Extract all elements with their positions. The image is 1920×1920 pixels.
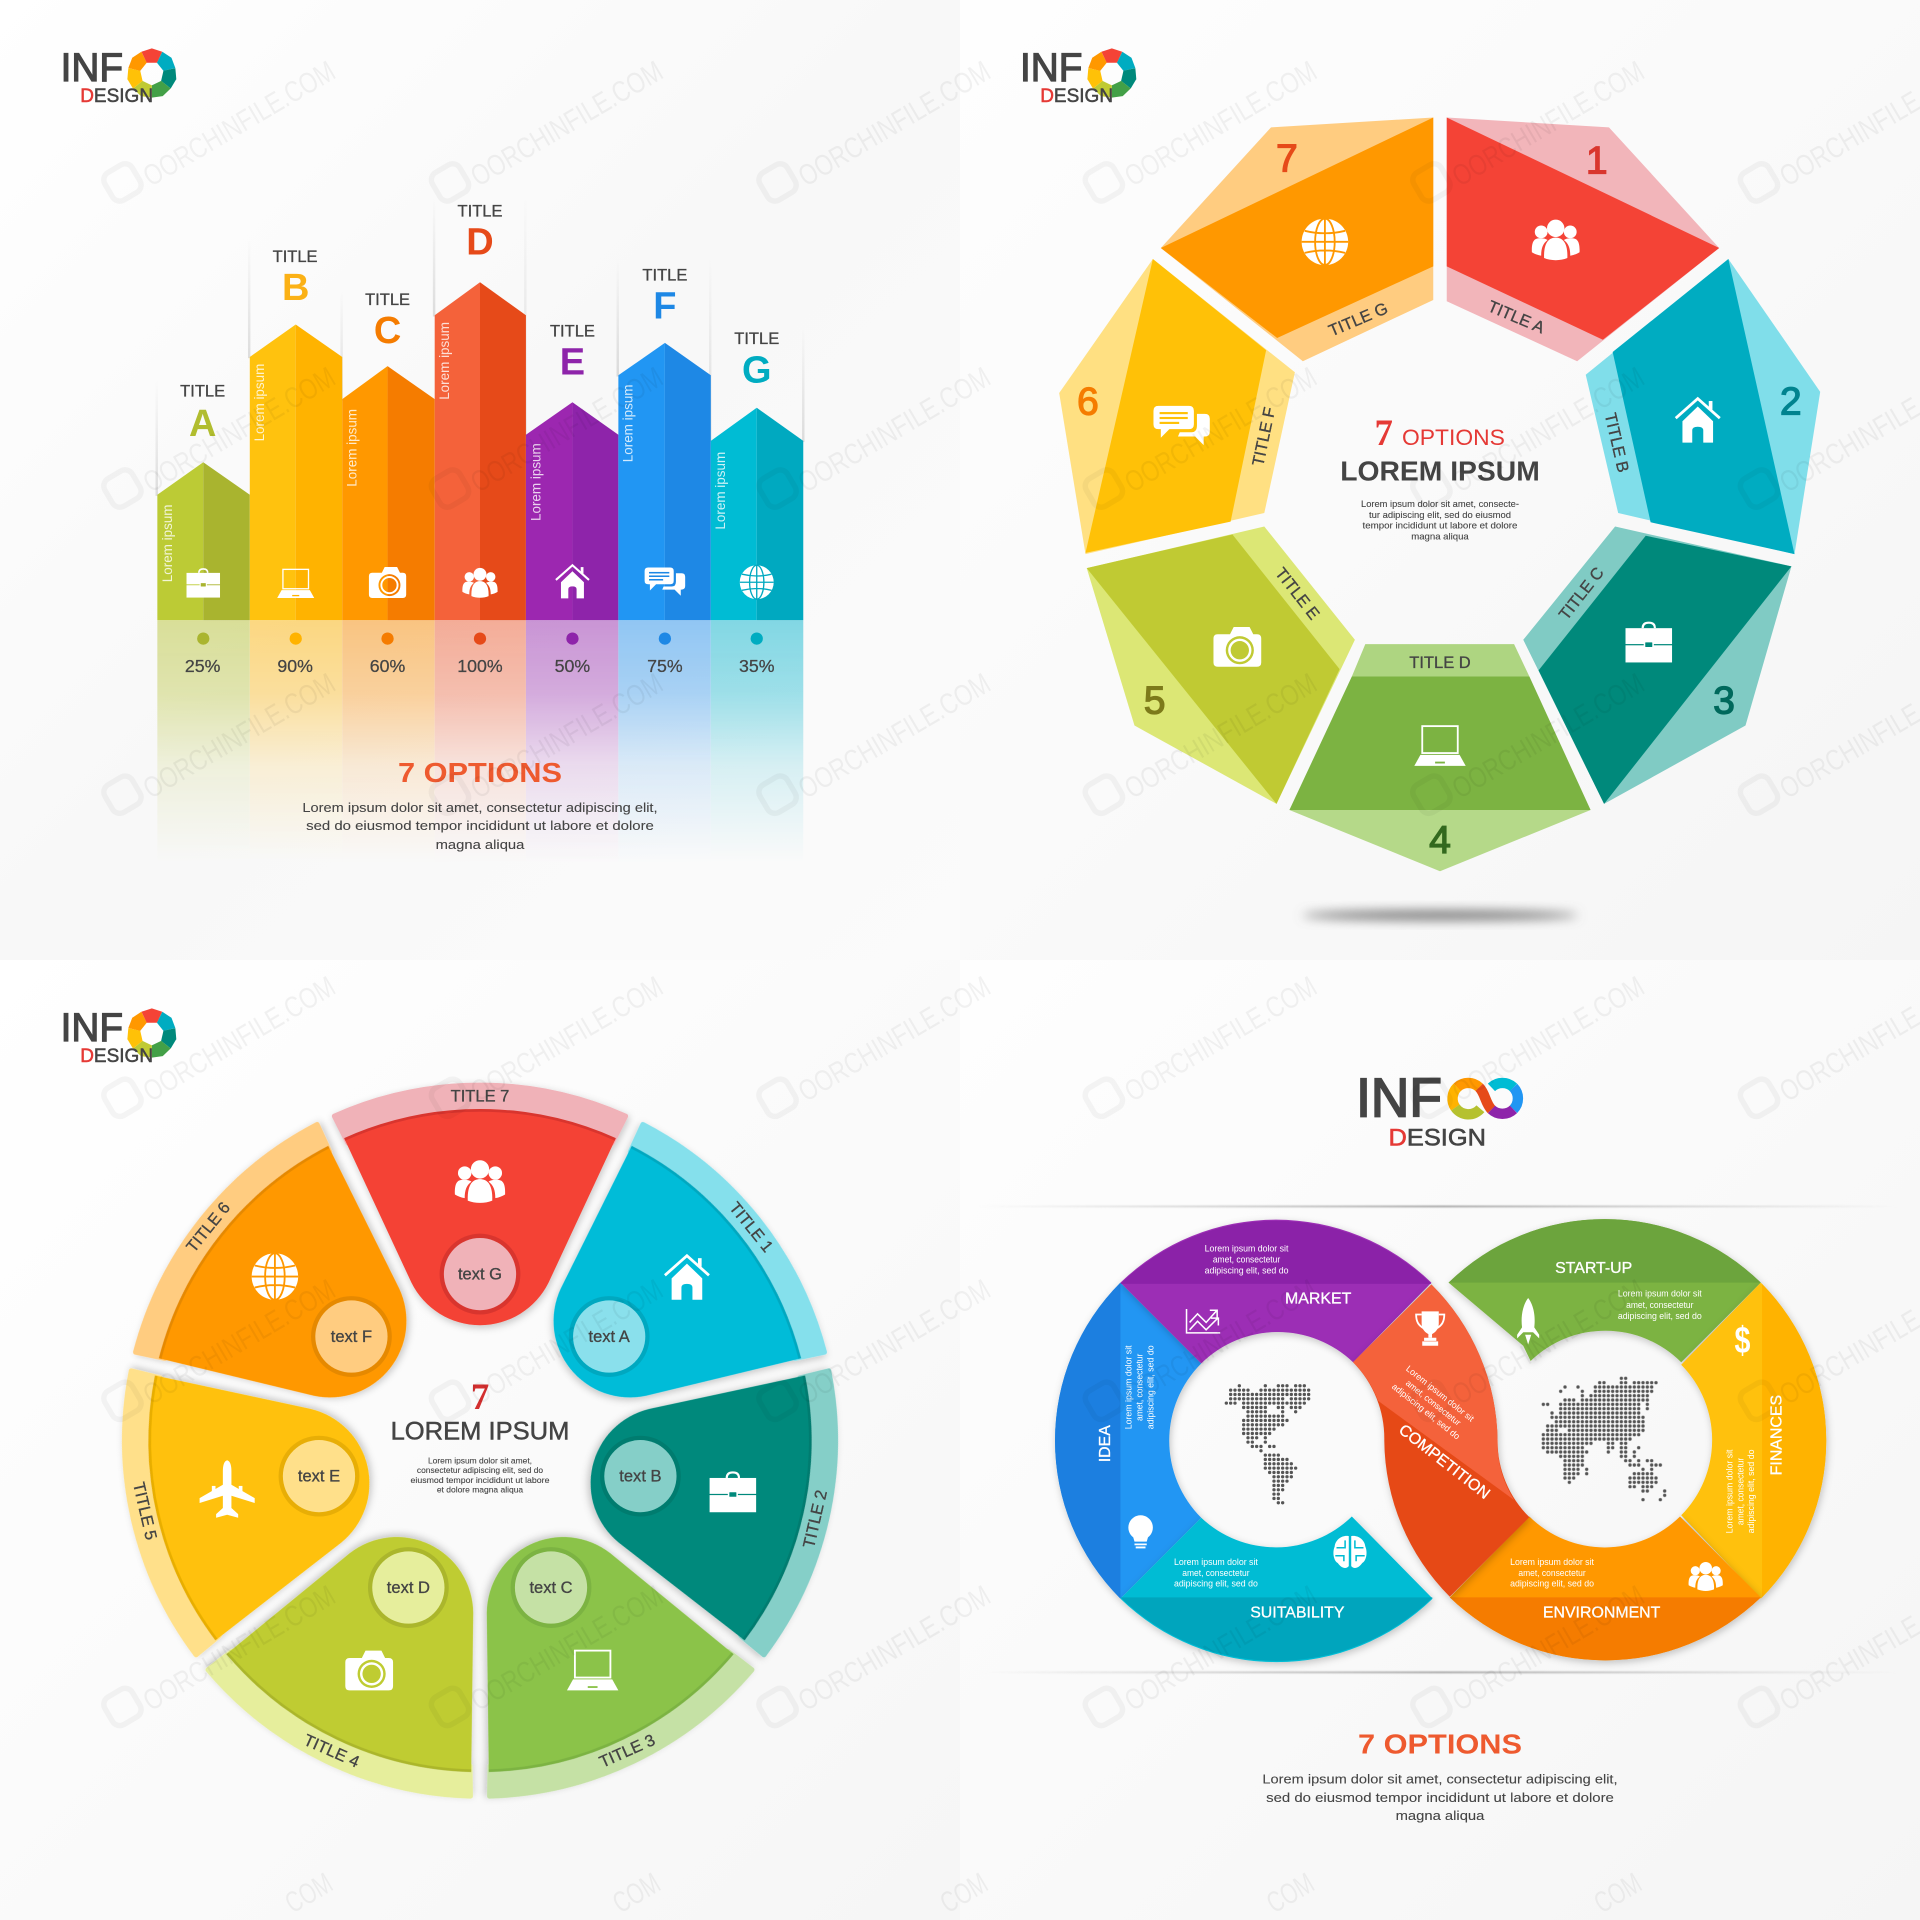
segment 2: 2 [1780,380,1802,423]
segment: environment: adipiscing elit, sed do [1510,1578,1594,1588]
description text [302,800,658,852]
center text: tempor incididunt ut labore et dolore [1363,520,1518,530]
segment: suitability: SUITABILITY [1250,1605,1345,1622]
bar F: 75% [647,656,683,676]
bar F [618,265,711,676]
segment: title 2: text B [619,1467,662,1486]
segment: idea: amet, consectetur [1134,1354,1144,1421]
segment: title 1: text A [589,1327,630,1346]
description text: sed do eiusmod tempor incididunt ut labore et dolore [306,818,654,833]
segment 3: TITLE C [1555,563,1608,624]
segment: competition: Lorem ipsum dolor sit [1404,1364,1476,1424]
segment: title 1: TITLE 1 [725,1198,777,1256]
segment 5: TITLE E [1271,564,1324,623]
center heading: OPTIONS [1402,425,1505,450]
segment: finances: adipiscing elit, sed do [1746,1449,1756,1533]
segment: title 3: text C [529,1578,573,1597]
segment: finances: $ [1734,1320,1750,1362]
description text [1262,1771,1618,1823]
watermarks: COM [1588,1867,1647,1920]
segment 2 [1586,259,1820,554]
segment: idea: adipiscing elit, sed do [1145,1345,1155,1429]
segment 1: 1 [1586,139,1608,182]
segment 6: TITLE F [1248,405,1279,468]
segment 6: 6 [1077,380,1099,423]
heading: 7 options: 7 OPTIONS [398,757,562,788]
segment: suitability: adipiscing elit, sed do [1174,1578,1258,1588]
watermarks: COM [279,1867,338,1920]
center text: et dolore magna aliqua [437,1486,524,1495]
bar B: B [282,267,309,309]
segment: market: amet, consectetur [1213,1254,1280,1264]
segment 1 [1447,118,1719,361]
segment 5 [1087,527,1355,804]
segment: title 6: TITLE 6 [182,1198,234,1256]
segment: title 1 [479,1105,849,1483]
bar F: TITLE [642,265,687,284]
logo [1020,46,1139,107]
bar D: 100% [457,656,503,676]
segment: suitability [1120,1517,1433,1662]
bar E: E [560,342,585,384]
logo [61,1006,179,1067]
description text: Lorem ipsum dolor sit amet, consectetur adipiscing elit, [1262,1771,1618,1786]
logo: infinity: DESIGN [1389,1125,1486,1152]
description text: magna aliqua [436,837,525,852]
logo: INF [1020,46,1082,90]
segment: market [1120,1220,1431,1363]
segment: title 6: text F [331,1327,372,1346]
segment: market: adipiscing elit, sed do [1205,1265,1289,1275]
segment: title 4: TITLE 4 [301,1730,362,1772]
divider bottom [978,1671,1903,1673]
bar E: TITLE [550,322,595,341]
center text: consectetur adipiscing elit, sed do [417,1466,543,1475]
center text [1361,499,1519,541]
segment 7: 7 [1276,137,1298,180]
heading: 7 options: 7 OPTIONS [1358,1728,1522,1759]
description text: sed do eiusmod tempor incididunt ut labore et dolore [1266,1790,1614,1805]
panel: infinity chart [978,1067,1903,1823]
segment: suitability: amet, consectetur [1182,1568,1250,1578]
bar F: F [653,285,676,327]
segment: suitability: Lorem ipsum dolor sit [1174,1557,1258,1567]
segment: title 2 [560,1324,859,1662]
logo: DESIGN [80,86,153,107]
segment: finances: FINANCES [1769,1395,1786,1475]
bar C [342,290,435,676]
logo: DESIGN [1040,86,1113,107]
bar G: G [742,350,771,392]
segment 4 [1289,644,1591,871]
divider top [978,1206,1903,1207]
center text: tur adipiscing elit, sed do eiusmod [1369,510,1511,520]
segment: finances [1681,1283,1826,1599]
bar F: Lorem ipsum [619,384,635,462]
segment: start-up [1449,1219,1761,1362]
segment 4: 4 [1429,819,1451,862]
logo: INF [61,1006,123,1050]
bar B: 90% [277,656,313,676]
panel: polygon ring chart [1020,46,1820,920]
bar D: Lorem ipsum [436,322,452,400]
segment: start-up: Lorem ipsum dolor sit [1618,1289,1702,1299]
segment: start-up: START-UP [1555,1260,1632,1277]
segment: environment: Lorem ipsum dolor sit [1510,1557,1594,1567]
segment: market: MARKET [1285,1290,1352,1307]
floor shadow [1302,910,1578,920]
bar C: TITLE [365,290,410,309]
segment 4: TITLE D [1409,653,1471,672]
segment 6 [1059,259,1295,554]
bar G: TITLE [734,329,779,348]
bar A: Lorem ipsum [159,504,175,582]
segment: title 3 [399,1481,766,1824]
segment: competition: COMPETITION [1395,1421,1493,1503]
center heading [391,1376,569,1445]
segment 5: 5 [1144,679,1166,722]
segment 7: TITLE G [1326,298,1391,340]
bar C: Lorem ipsum [343,409,359,487]
segment: environment: amet, consectetur [1518,1568,1586,1578]
world map: eurasia [1543,1378,1665,1500]
bar A: TITLE [180,382,225,401]
panel: arrow bar chart [61,46,804,865]
bar E [526,322,618,676]
panel: circular teardrop chart [61,1006,859,1824]
segment: environment [1450,1517,1761,1660]
bar D: TITLE [458,202,502,221]
segment 7 [1161,118,1433,361]
bar A: A [189,403,216,445]
bar C: C [374,310,401,352]
segment: competition [1353,1284,1529,1597]
center text: Lorem ipsum dolor sit amet, [428,1456,532,1465]
reflections under bars [157,620,804,840]
description text: Lorem ipsum dolor sit amet, consectetur adipiscing elit, [302,800,658,815]
segment 2: TITLE B [1601,411,1633,474]
segment: competition: amet, consectetur [1404,1378,1463,1428]
segment 1: TITLE A [1485,297,1547,337]
center heading: LOREM IPSUM [391,1417,569,1445]
segment: finances: Lorem ipsum dolor sit [1725,1449,1735,1533]
segment: environment: ENVIRONMENT [1543,1605,1661,1622]
watermarks: COM [935,1867,994,1920]
segment: market: Lorem ipsum dolor sit [1205,1243,1289,1253]
watermarks: COM [1261,1867,1320,1920]
bar B: TITLE [273,247,318,266]
bar G: Lorem ipsum [712,452,728,530]
segment: finances: amet, consectetur [1736,1458,1746,1525]
segment: title 4 [194,1481,561,1824]
bar G [711,329,803,676]
logo: INF [61,46,123,90]
segment: title 4: text D [387,1578,430,1597]
segment: title 7 [334,1085,626,1325]
bar C: 60% [370,656,406,676]
column edge shadows [156,196,804,496]
center heading: 7 [1374,412,1393,453]
segment: idea [1055,1283,1201,1599]
bar A [157,382,250,676]
segment: competition: adipiscing elit, sed do [1390,1381,1462,1441]
bar A: 25% [185,656,221,676]
bar B: Lorem ipsum [251,364,267,441]
segment 3 [1523,527,1791,804]
center heading: LOREM IPSUM [1340,456,1540,487]
logo: DESIGN [80,1046,153,1067]
center heading: 7 [471,1376,489,1417]
segment: start-up: amet, consectetur [1626,1300,1694,1310]
bar B [250,247,342,676]
bar G: 35% [739,656,775,676]
segment: title 6 [111,1105,481,1483]
bar D [435,202,526,676]
center text: Lorem ipsum dolor sit amet, consecte- [1361,499,1519,509]
watermarks: COM [607,1867,666,1920]
center heading [1340,412,1540,487]
segment: title 7: TITLE 7 [451,1086,509,1105]
bar E: 50% [555,656,590,676]
description text: magna aliqua [1396,1808,1485,1823]
bar D: D [466,222,494,264]
center text: magna aliqua [1411,531,1469,541]
logo [61,46,179,107]
center text [411,1456,550,1495]
segment: idea: Lorem ipsum dolor sit [1123,1345,1133,1429]
world map: americas [1226,1386,1309,1503]
bar E: Lorem ipsum [528,443,544,521]
segment: title 3: TITLE 3 [596,1730,658,1772]
logo: infinity: INF [1356,1067,1442,1129]
segment: title 5: TITLE 5 [129,1480,161,1542]
segment: idea: IDEA [1097,1425,1114,1462]
center text: eiusmod tempor incididunt ut labore [411,1476,550,1485]
segment: title 5 [101,1324,400,1662]
segment 3: 3 [1713,679,1735,722]
segment: title 2: TITLE 2 [799,1488,831,1550]
segment: title 7: text G [458,1265,502,1284]
segment: title 5: text E [298,1467,340,1486]
segment: start-up: adipiscing elit, sed do [1618,1311,1702,1321]
logo: infinity [1356,1067,1518,1152]
